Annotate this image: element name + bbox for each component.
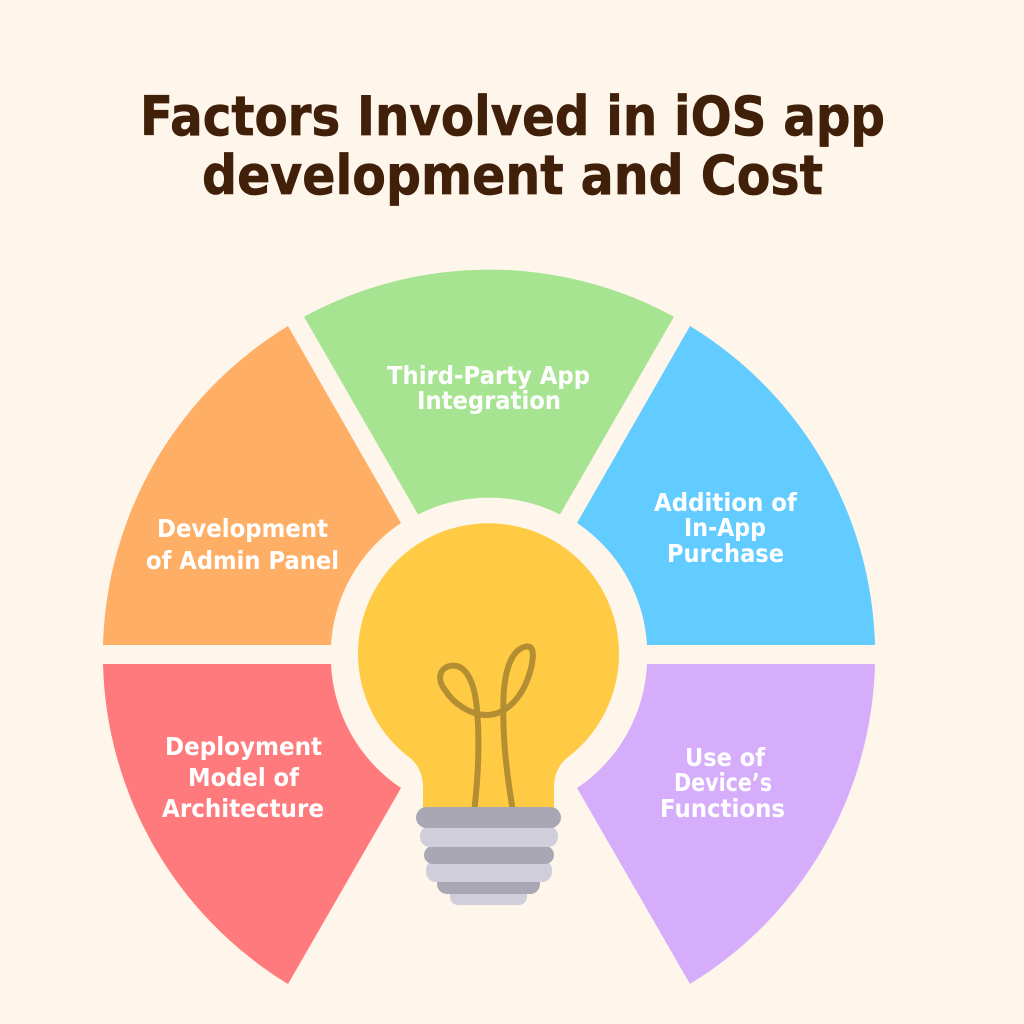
title: Factors Involved in iOS app	[140, 85, 885, 148]
panel: Deployment Model of Architecture: Deployment	[165, 732, 322, 761]
panel: Use of Device's Functions: Device’s	[674, 768, 772, 797]
panel: Third-Party App Integration: Integration	[417, 386, 561, 415]
screw base	[416, 807, 561, 905]
panel: Use of Device's Functions	[577, 664, 875, 984]
filament	[440, 646, 533, 807]
icon: light bulb	[358, 523, 619, 905]
panel: Use of Device's Functions: Functions	[660, 794, 785, 823]
panel: Addition of In-App Purchase: Purchase	[667, 539, 784, 568]
panel: Addition of In-App Purchase	[577, 326, 875, 645]
panel: Use of Device's Functions: Use of	[685, 743, 765, 772]
panel: Third-Party App Integration	[304, 270, 674, 514]
panel: Development of Admin Panel: of Admin Panel	[146, 546, 339, 575]
panel: Deployment Model of Architecture: Model of	[188, 763, 299, 792]
panel: Deployment Model of Architecture	[103, 664, 401, 984]
title: development and Cost	[202, 144, 823, 207]
bulb glass	[358, 523, 619, 808]
panel: Addition of In-App Purchase: In-App	[684, 513, 766, 542]
panel: Development of Admin Panel	[103, 326, 401, 645]
panel: Addition of In-App Purchase: Addition of	[654, 488, 797, 517]
panel: Third-Party App Integration: Third-Party App	[387, 361, 590, 390]
title	[140, 85, 885, 207]
panel: Deployment Model of Architecture: Architecture	[162, 794, 324, 823]
panel: Development of Admin Panel: Development	[157, 514, 328, 543]
